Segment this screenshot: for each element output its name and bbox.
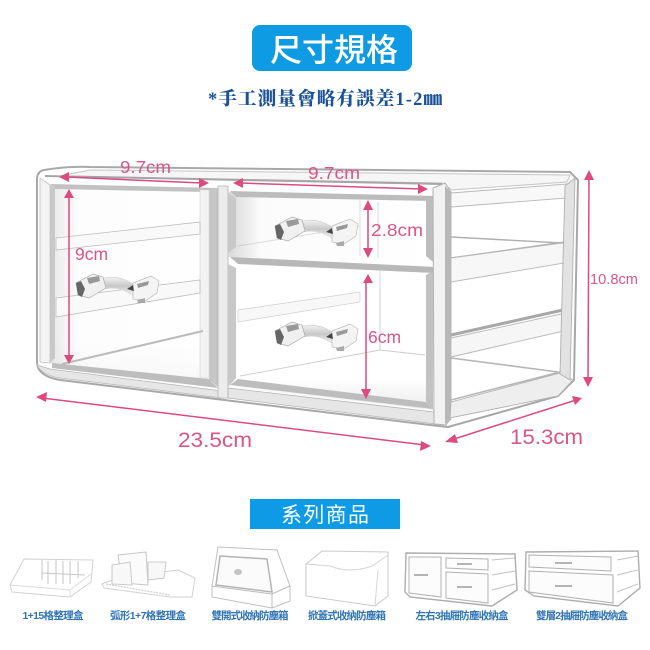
product thumbnail: curved 1+7 organizer bbox=[102, 552, 195, 597]
dimension: top drawer height 2.8cm: 2.8cm bbox=[371, 220, 423, 240]
centre divider bbox=[218, 186, 228, 398]
dimension: right drawer width 9.7cm bbox=[233, 163, 428, 194]
dimension: left drawer width 9.7cm bbox=[59, 157, 209, 188]
product thumbnail: double-door dust box bbox=[212, 547, 290, 608]
front right corner post bbox=[433, 183, 451, 425]
product thumbnail: left-right 3-drawer box bbox=[405, 553, 517, 606]
dimension: total height 10.8cm bbox=[583, 170, 638, 387]
product thumbnail: double-layer 2-drawer box bbox=[525, 551, 640, 606]
right top drawer bbox=[228, 191, 436, 273]
dimension: total height 10.8cm: 10.8cm bbox=[590, 272, 638, 288]
product illustration: acrylic three-drawer box bbox=[37, 167, 578, 427]
title: size specifications badge: 尺寸規格 bbox=[270, 32, 398, 68]
dimension: total width 23.5cm bbox=[36, 392, 431, 452]
section heading: series products bbox=[250, 499, 400, 529]
label: 左右3抽屜防塵收納盒 bbox=[416, 609, 509, 622]
drawer handle: right bottom bbox=[275, 322, 358, 351]
dimension: top drawer height 2.8cm bbox=[363, 200, 423, 258]
dimension: left drawer height 9cm bbox=[64, 189, 108, 364]
drawer handle: right top bbox=[275, 217, 358, 246]
label: 掀蓋式收納防塵箱 bbox=[308, 609, 386, 622]
product thumbnail: 1+15 grid organizer bbox=[10, 559, 93, 597]
product thumbnail: flip-lid dust box bbox=[306, 551, 388, 606]
label: 弧形1+7格整理盒 bbox=[110, 609, 186, 622]
label: 雙開式收納防塵箱 bbox=[212, 609, 289, 622]
dimension: total width 23.5cm: 23.5cm bbox=[178, 428, 252, 452]
title: size specifications badge bbox=[252, 25, 412, 71]
left drawer bbox=[37, 178, 222, 398]
label: 雙層2抽屜防塵收納盒 bbox=[536, 609, 628, 622]
section heading: series products: 系列商品 bbox=[281, 504, 369, 527]
side panel with three shelves bbox=[450, 178, 575, 418]
dimension: total depth 15.3cm: 15.3cm bbox=[510, 425, 583, 449]
drawer handle: left bbox=[76, 274, 159, 303]
right bottom drawer bbox=[228, 264, 436, 424]
dimension: bottom drawer height 6cm: 6cm bbox=[368, 327, 401, 347]
subtitle: measurement tolerance note: *手工測量會略有誤差1-2㎜ bbox=[208, 88, 442, 110]
dimension: right drawer width 9.7cm: 9.7cm bbox=[308, 163, 360, 183]
dimension: total depth 15.3cm bbox=[445, 396, 583, 449]
label: 1+15格整理盒 bbox=[22, 609, 84, 622]
box body and top bbox=[37, 167, 578, 427]
dimension: left drawer height 9cm: 9cm bbox=[75, 244, 108, 264]
dimension: bottom drawer height 6cm bbox=[361, 274, 401, 399]
dimension: left drawer width 9.7cm: 9.7cm bbox=[120, 157, 171, 177]
